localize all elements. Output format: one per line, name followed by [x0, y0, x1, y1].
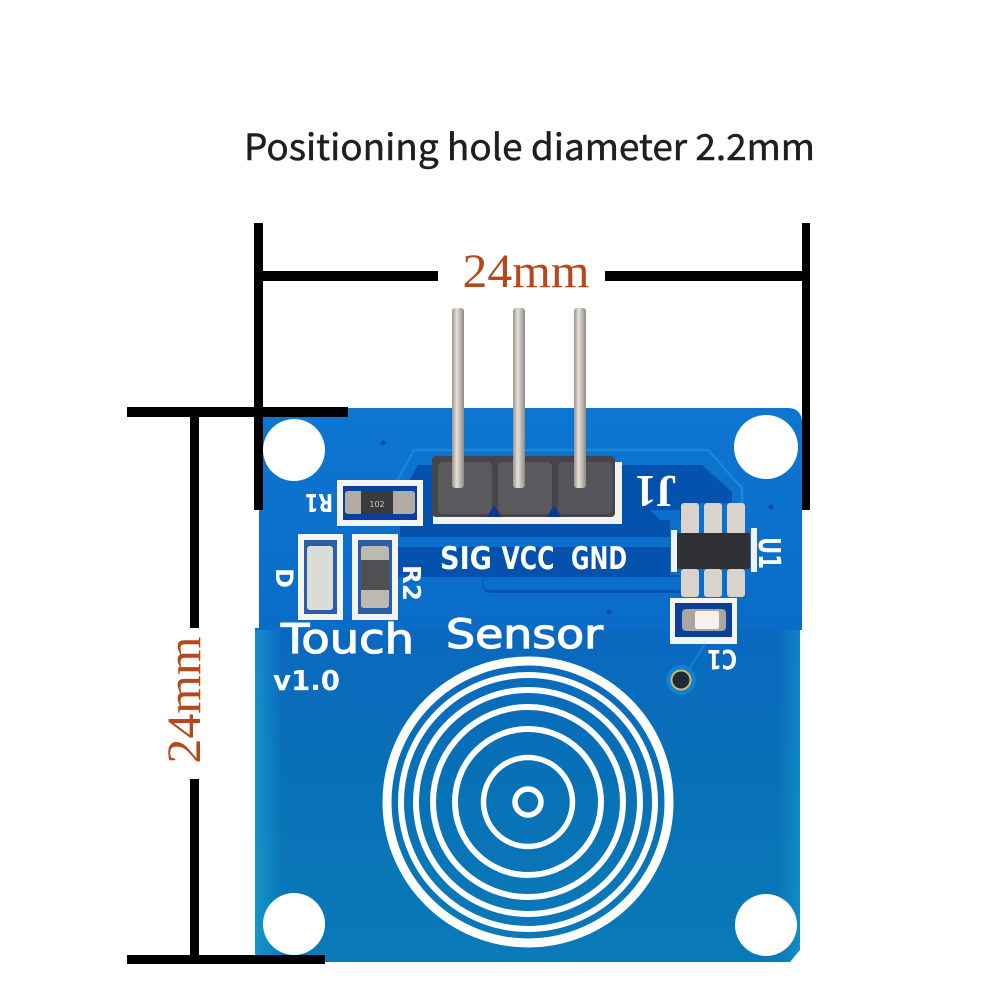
- silkscreen labels: D: [270, 568, 298, 588]
- component R1: [337, 480, 423, 526]
- horizontal width dimension: [254, 223, 810, 510]
- touch pad rings: [387, 661, 669, 943]
- mounting holes: [263, 415, 798, 956]
- pin header: [432, 308, 622, 524]
- silkscreen labels: v1.0: [273, 664, 340, 697]
- silkscreen labels: VCC: [502, 541, 554, 577]
- silkscreen labels: C1: [707, 643, 737, 674]
- silkscreen labels: GND: [571, 541, 627, 577]
- component D: [298, 534, 343, 620]
- component R1: 102: [369, 500, 385, 509]
- silkscreen labels: R2: [397, 565, 426, 601]
- chip U1: [671, 503, 757, 597]
- vertical height dimension: [127, 407, 348, 964]
- silkscreen labels: Sensor: [446, 612, 604, 658]
- title: Positioning hole diameter 2.2mm: [244, 119, 815, 171]
- board upper section: [259, 408, 802, 630]
- silkscreen labels: U1: [751, 537, 786, 569]
- silkscreen labels: [270, 466, 786, 697]
- silkscreen labels: J1: [635, 466, 677, 517]
- copper traces: [398, 465, 732, 593]
- vertical height dimension: 24mm: [158, 636, 211, 764]
- via: [666, 644, 705, 695]
- component R2: [352, 534, 398, 620]
- horizontal width dimension: 24mm: [462, 245, 590, 298]
- board lower section: [255, 628, 800, 962]
- silkscreen labels: R1: [305, 488, 333, 517]
- small vias: [380, 440, 774, 614]
- silkscreen labels: SIG: [440, 541, 492, 577]
- silkscreen labels: Touch: [280, 615, 414, 663]
- panel: circuit board: [255, 308, 802, 962]
- component C1: [670, 598, 737, 644]
